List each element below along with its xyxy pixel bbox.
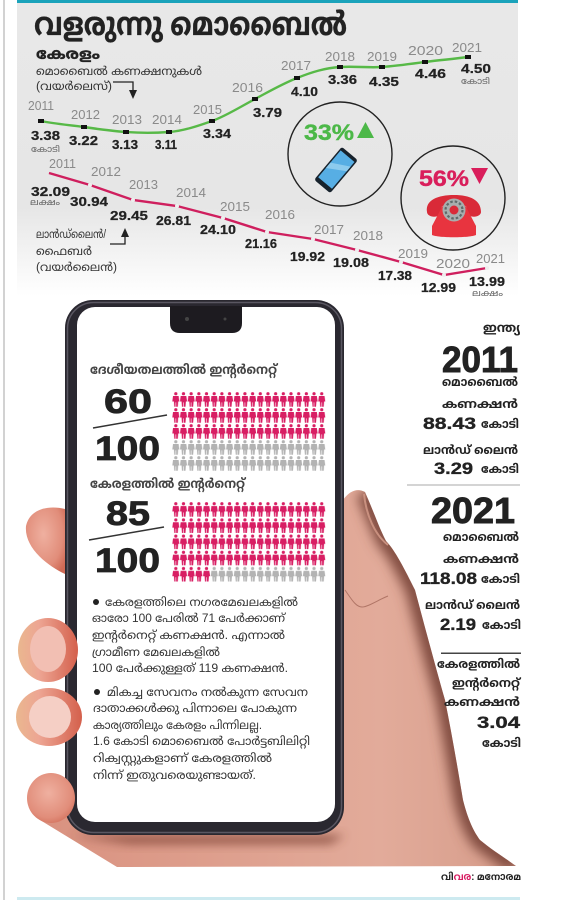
text block: mobile number portability: മികച്ച സേവനം നൽകുന്ന സേവന [107, 686, 309, 699]
phone screen [77, 307, 335, 822]
values: landline: 21.16 [245, 236, 277, 251]
values: mobile: 4.10 [291, 84, 318, 99]
years: landline [49, 157, 505, 271]
source credit: വിവര: മനോരമ [441, 871, 521, 883]
values: mobile: കോടി [461, 76, 490, 86]
fraction: 85 of 100: 85 [106, 495, 150, 533]
screen heading: national internet: ദേശീയതലത്തിൽ ഇന്റർനെറ്റ് [90, 362, 279, 379]
values: mobile: കോടി [31, 144, 60, 154]
pictogram: 60 of 100 people [172, 392, 326, 472]
icon: red telephone [427, 195, 481, 237]
years: landline: 2014 [176, 186, 206, 200]
text block: urban and rural connections: ഗ്രാമീണ മേഖലകളിൽ [92, 646, 220, 659]
values: landline: 26.81 [156, 213, 191, 228]
years: mobile: 2018 [325, 50, 355, 64]
India stats: 2011: കോടി [481, 462, 519, 476]
India stats: 2011: 2011 [442, 339, 518, 380]
years: landline: 2021 [476, 252, 505, 266]
India stats: 2011: മൊബൈൽ [442, 375, 518, 389]
text block: urban and rural connections: ഇന്റർനെറ്റ് കണക്ഷൻ. എന്നാൽ [92, 629, 285, 643]
Kerala internet connections stat: ഇന്റർനെറ്റ് [452, 676, 522, 692]
India stats: 2021: 2.19 [440, 615, 476, 634]
label: landline/fibre (wireline): (വയർലൈൻ) [36, 262, 117, 274]
years: mobile: 2015 [193, 103, 222, 117]
text block: urban and rural connections [92, 596, 298, 675]
top panel background [17, 0, 518, 296]
heading: Kerala: കേരളം [36, 46, 101, 63]
values: landline: 19.92 [290, 249, 325, 264]
values: landline: 17.38 [378, 268, 412, 283]
values: mobile: 3.79 [253, 105, 282, 120]
India stats: 2021: 2021 [431, 490, 515, 531]
text block: urban and rural connections: ഓരോ 100 പേരിൽ 71 പേർക്കാണ് [92, 612, 286, 625]
values: landline: 29.45 [110, 208, 148, 223]
values: mobile: 3.13 [112, 137, 138, 152]
years: landline: 2011 [49, 157, 76, 171]
fraction: 60 of 100: 100 [95, 430, 160, 468]
label: mobile connections (wireless): (വയർലെസ്) [36, 80, 112, 93]
screen heading: Kerala internet: കേരളത്തിൽ ഇന്റർനെറ്റ് [90, 476, 247, 493]
callout: landline down 56%: 56% [419, 166, 469, 191]
years: mobile: 2020 [408, 44, 443, 58]
fraction: 85 of 100: 100 [95, 542, 160, 580]
years: landline: 2016 [265, 208, 295, 222]
fraction: 60 of 100 [93, 383, 167, 468]
years: mobile: 2021 [452, 41, 482, 55]
India stats: 2021 [420, 490, 521, 634]
label: landline/fibre (wireline) [36, 228, 117, 274]
finger 2 [18, 618, 78, 682]
title: വളരുന്നു മൊബൈൽ [34, 6, 347, 43]
text block: mobile number portability: റിക്വസ്റ്റുകളാണ് കേരളത്തിൽ [93, 752, 272, 766]
values: landline: 30.94 [70, 194, 109, 209]
text block: urban and rural connections: 100 പേർക്കുള്ളത് 119 കണക്ഷൻ. [92, 662, 288, 675]
years: mobile: 2011 [28, 99, 54, 113]
values: mobile: 3.22 [69, 133, 98, 148]
callout: landline down 56% [401, 146, 505, 250]
text block: mobile number portability [93, 686, 310, 782]
India stats: 2011: 3.29 [434, 459, 473, 478]
values: mobile [31, 61, 491, 154]
callout: mobile up 33% [288, 102, 392, 206]
finger 3 [16, 688, 82, 746]
finger 1 [26, 507, 65, 574]
values: landline: 32.09 [31, 184, 70, 199]
values: mobile: 3.36 [328, 72, 357, 87]
fraction: 60 of 100: 60 [104, 383, 152, 421]
India stats: 2021: കോടി [481, 572, 520, 586]
values: landline: 13.99 [469, 274, 505, 289]
finger 4 [27, 773, 75, 823]
Kerala internet connections stat: 3.04 [477, 713, 521, 732]
text block: mobile number portability: 1.6 കോടി മൊബൈൽ പോർട്ടബിലിറ്റി [93, 735, 310, 749]
India stats: 2021: മൊബൈൽ [443, 530, 519, 544]
India stats: 2011: ഇന്ത്യ [483, 321, 520, 336]
years: mobile: 2019 [367, 50, 397, 64]
values: landline: ലക്ഷം [472, 288, 503, 298]
years: landline: 2020 [436, 257, 470, 271]
years: landline: 2018 [353, 229, 383, 243]
label: landline/fibre (wireline): ഫൈബർ [36, 246, 93, 258]
values: landline: 19.08 [333, 255, 369, 270]
icon: smartphone [314, 147, 358, 193]
values: mobile: 4.35 [369, 74, 399, 89]
years: mobile: 2012 [71, 108, 100, 122]
callout: mobile up 33%: 33% [304, 120, 354, 145]
years: mobile: 2014 [152, 113, 182, 127]
values: mobile: 4.50 [461, 61, 491, 76]
India stats: 2021: 118.08 [420, 569, 477, 588]
fraction: 85 of 100 [89, 495, 164, 580]
values: landline [30, 184, 505, 298]
values: mobile: 3.11 [155, 137, 177, 152]
hand: palm and thumb [40, 490, 516, 867]
text block: mobile number portability: നിന്ന് ഇതുവരെയുണ്ടായത്. [93, 769, 256, 782]
arrow: wireless to green line [113, 82, 137, 99]
India stats: 2021: ലാൻഡ് ലൈൻ [425, 598, 520, 612]
Kerala internet connections stat: കണക്ഷൻ [444, 695, 520, 709]
Kerala internet connections stat: കേരളത്തിൽ [437, 657, 520, 671]
Kerala internet connections stat [437, 657, 522, 750]
India stats: 2011: കണക്ഷൻ [442, 397, 518, 411]
values: landline: 12.99 [421, 280, 456, 295]
years: mobile: 2016 [232, 81, 263, 95]
text block: mobile number portability: കാര്യത്തിലും കേരളം പിന്നിലല്ല. [93, 719, 262, 733]
Kerala internet connections stat: കോടി [482, 736, 521, 750]
years: mobile [28, 41, 482, 127]
India stats: 2021: കണക്ഷൻ [443, 552, 519, 566]
years: landline: 2017 [314, 223, 344, 237]
text block: mobile number portability: ദാതാക്കൾക്കു പിന്നാലെ പോകുന്ന [93, 702, 297, 715]
hand: fingers [16, 507, 82, 823]
values: mobile: 4.46 [415, 66, 446, 81]
India stats: 2011: ലാൻഡ് ലൈൻ [423, 443, 518, 457]
years: landline: 2019 [398, 247, 428, 261]
years: landline: 2012 [91, 165, 121, 179]
line chart: mobile connections [28, 41, 491, 154]
India stats: 2011 [423, 321, 520, 478]
years: landline: 2015 [220, 200, 250, 214]
India stats: 2011: കോടി [481, 417, 519, 431]
years: mobile: 2017 [281, 59, 311, 73]
line chart: landline connections [30, 157, 505, 298]
label: mobile connections (wireless) [36, 66, 202, 93]
text block: urban and rural connections: കേരളത്തിലെ നഗരമേഖലകളിൽ [105, 596, 298, 609]
values: landline: 24.10 [200, 222, 236, 237]
pictogram: 85 of 100 people [172, 502, 326, 583]
years: landline: 2013 [129, 178, 158, 192]
values: mobile: 3.38 [31, 128, 60, 143]
India stats: 2021: കോടി [482, 618, 521, 632]
phone body [65, 300, 344, 835]
years: mobile: 2013 [112, 113, 142, 127]
India stats: 2011: 88.43 [423, 414, 476, 433]
label: landline/fibre (wireline): ലാൻഡ്‌ലൈൻ/ [36, 228, 107, 241]
values: landline: ലക്ഷം [30, 197, 60, 207]
values: mobile: 3.34 [203, 126, 232, 141]
label: mobile connections (wireless): മൊബൈൽ കണക്ഷനുകൾ [36, 66, 202, 78]
phone notch [170, 306, 242, 333]
arrow: wireline to pink line [110, 228, 129, 244]
